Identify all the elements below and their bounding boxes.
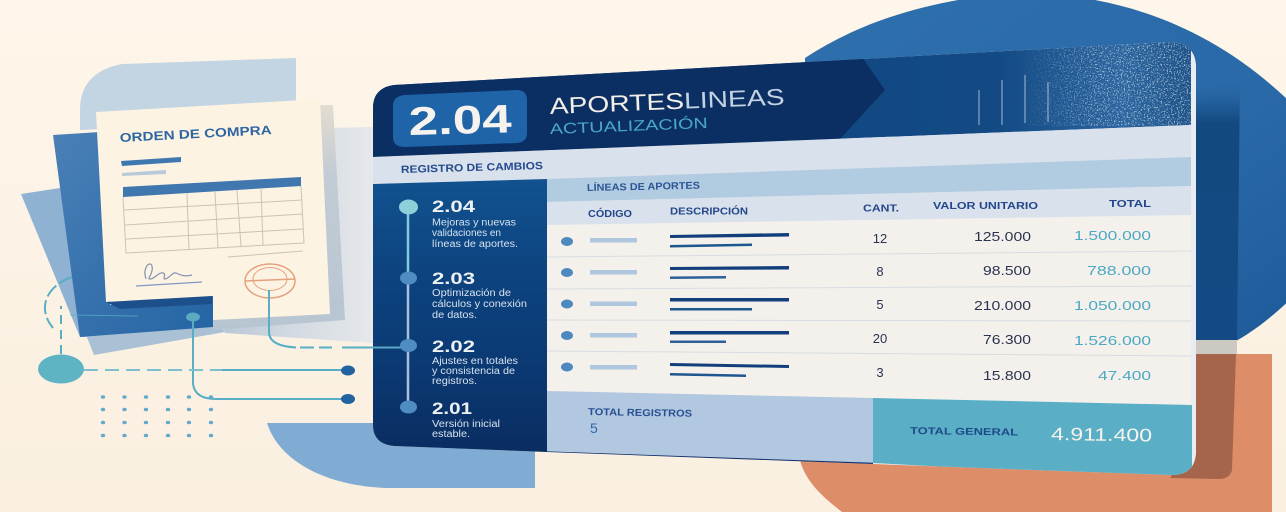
dashed arc connector — [45, 277, 72, 328]
header subtitle: ACTUALIZACIÓN — [550, 115, 708, 138]
timeline line lower — [407, 278, 409, 407]
card base — [373, 40, 1196, 480]
total records panel: 5 — [590, 420, 598, 436]
document heading bars — [121, 157, 181, 176]
item 2.01 — [400, 400, 500, 437]
item 2.03: 2.03 — [432, 269, 475, 288]
row 1: 125.000 — [974, 229, 1031, 244]
card panel — [373, 40, 1196, 480]
item 2.02: registros. — [432, 376, 477, 387]
lines heading: LÍNEAS DE APORTES — [587, 179, 700, 194]
grand total panel — [873, 398, 1192, 480]
header vertical marks — [979, 75, 1048, 125]
changelog heading: REGISTRO DE CAMBIOS — [401, 160, 543, 176]
row 4 — [561, 331, 1150, 345]
header dark chevron — [373, 59, 885, 157]
row 3: 5 — [876, 297, 884, 312]
item 2.01: Versión inicial — [432, 419, 500, 430]
bottom edge line — [547, 452, 873, 464]
item 2.04: 2.04 — [432, 197, 476, 216]
order connector — [193, 317, 348, 399]
item 2.04: Mejoras y nuevas — [432, 218, 516, 228]
dashed vertical connector — [60, 306, 62, 354]
stamp — [245, 264, 295, 298]
column headers: CANT. — [863, 204, 899, 214]
item 2.03: de datos. — [432, 310, 477, 321]
dot grid — [101, 395, 213, 437]
row 1: 1.500.000 — [1074, 228, 1151, 243]
column headers: VALOR UNITARIO — [933, 201, 1038, 212]
card right edge — [1191, 40, 1196, 480]
thin trace on folder — [70, 315, 138, 316]
grand total panel: 4.911.400 — [1051, 424, 1152, 445]
row 1: 12 — [873, 231, 887, 246]
row 3 — [561, 298, 1150, 310]
item 2.04: líneas de aportes. — [432, 239, 518, 250]
header title: APORTES LINEAS — [549, 84, 785, 119]
connector end node 2 — [341, 394, 355, 404]
item 2.02: 2.02 — [432, 337, 475, 356]
row 4: 20 — [873, 331, 887, 346]
solid connector horizontal — [222, 369, 348, 371]
teal node — [38, 354, 84, 384]
row 5 — [561, 362, 1150, 380]
item 2.04 — [399, 197, 518, 250]
item 2.03: Optimización de — [432, 288, 511, 299]
total records panel: TOTAL REGISTROS — [588, 407, 692, 420]
item 2.03: cálculos y conexión — [432, 299, 527, 310]
document title: ORDEN DE COMPRA — [119, 123, 272, 145]
blue half-round shape bottom — [267, 423, 535, 488]
back sheet — [21, 188, 86, 337]
row 1 — [561, 231, 1150, 248]
connector end node 1 — [341, 366, 355, 376]
version badge: 2.04 — [408, 97, 513, 144]
bluish shadow under folder — [84, 315, 225, 355]
column headers — [588, 200, 1151, 217]
row 3: 1.050.000 — [1074, 298, 1151, 313]
document table — [123, 177, 304, 257]
row 5: 47.400 — [1098, 368, 1151, 383]
pale shadow panel behind document — [215, 127, 373, 343]
column headers: TOTAL — [1109, 199, 1151, 210]
total records panel — [547, 391, 873, 463]
connector inside sidebar — [373, 346, 402, 348]
row 4: 76.300 — [983, 332, 1031, 347]
item 2.02: y consistencia de — [432, 366, 515, 377]
header band — [373, 40, 1191, 157]
signature — [136, 264, 202, 286]
item 2.04: validaciones en — [432, 228, 501, 239]
version badge — [393, 90, 527, 147]
folder node — [186, 312, 200, 322]
item 2.01: estable. — [432, 429, 470, 440]
dashed connector to circle — [84, 369, 222, 371]
paper sheet — [96, 99, 330, 320]
row 2: 788.000 — [1087, 263, 1151, 278]
folder flap shadow — [106, 296, 212, 309]
folder back — [53, 132, 213, 337]
stamp connector dashes — [300, 346, 332, 348]
stamp connector end — [342, 346, 373, 348]
column headers: CÓDIGO — [588, 207, 632, 220]
row separators — [547, 251, 1191, 356]
timeline line — [407, 207, 409, 278]
row 2: 8 — [876, 264, 884, 279]
column headers: DESCRIPCIÓN — [670, 204, 748, 218]
blue circle backdrop — [805, 0, 1286, 346]
pale blue shape behind document — [80, 58, 296, 130]
item 2.02 — [400, 337, 518, 387]
row 5: 15.800 — [983, 368, 1031, 383]
sidebar — [373, 179, 547, 460]
lines band — [547, 157, 1191, 202]
row 5: 3 — [876, 365, 884, 380]
stamp connector — [269, 290, 296, 348]
row 2: 98.500 — [983, 263, 1031, 278]
changelog band — [373, 125, 1191, 184]
document illustration — [21, 99, 345, 337]
item 2.01: 2.01 — [432, 399, 472, 418]
item 2.02: Ajustes en totales — [432, 356, 518, 367]
grand total panel: TOTAL GENERAL — [910, 426, 1018, 439]
header speckle texture — [1020, 42, 1191, 126]
paper shadow — [213, 105, 345, 330]
row 4: 1.526.000 — [1074, 333, 1151, 348]
row 3: 210.000 — [974, 298, 1031, 313]
connector lines — [45, 277, 373, 399]
column header band — [547, 186, 1191, 225]
orange block backdrop — [800, 354, 1272, 512]
row 2 — [561, 266, 1150, 279]
card shadow on backdrop — [1170, 85, 1240, 479]
item 2.03 — [400, 272, 526, 318]
